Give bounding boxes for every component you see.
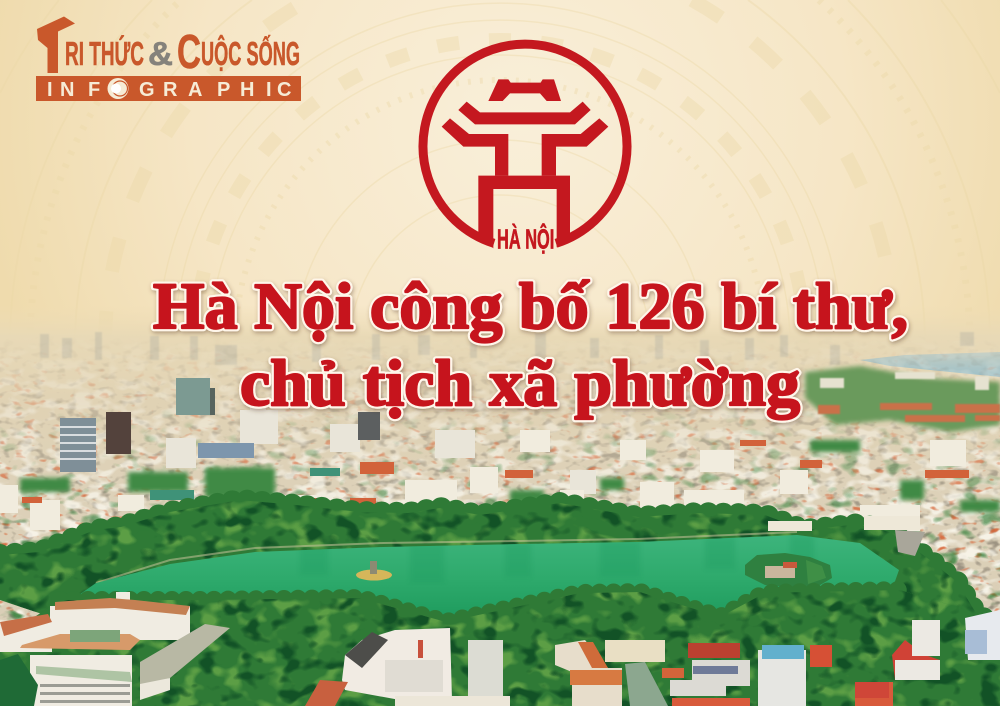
- trees surrounding the lake: [0, 500, 1000, 640]
- title red lettering: [153, 270, 908, 420]
- water surface: [76, 535, 899, 622]
- foliage highlights: [0, 500, 1000, 640]
- Hoan Kiem lake: [76, 535, 899, 622]
- title red lettering: chủ tịch xã phường: [240, 347, 800, 420]
- mid-ground roofs: [0, 430, 966, 531]
- foliage shadows: [0, 500, 1000, 640]
- city base haze: [0, 305, 1000, 706]
- dense buildings texture: [0, 335, 1000, 706]
- logo wordmark: C: [177, 26, 201, 79]
- emblem lower right roof and column: [542, 118, 608, 176]
- logo wordmark: RI THỨC: [65, 35, 144, 72]
- right building complex: [555, 610, 1000, 706]
- Turtle Tower islet: [356, 561, 392, 580]
- emblem ring: [423, 44, 627, 243]
- foreground foliage shadows: [0, 590, 1000, 706]
- background: cream paper with bronze drum pattern: [0, 0, 1000, 345]
- brand logo: Tri thức & Cuộc sống Infographic: [36, 16, 301, 101]
- shoreline: [96, 532, 797, 583]
- distant tower silhouettes: [40, 332, 974, 365]
- Ngoc Son island: [745, 553, 832, 588]
- left building complex: [0, 592, 230, 706]
- emblem upper roof: [458, 102, 591, 124]
- foreground buildings and trees: [0, 590, 1000, 706]
- logo infographic band: INF: [47, 79, 100, 101]
- title white halo: Hà Nội công bố 126 bí thư,: [153, 270, 908, 343]
- title white halo: [153, 270, 908, 420]
- west lake in the distance: [860, 352, 1000, 377]
- street pavilion by the lake: [768, 516, 920, 531]
- central building complex: [305, 628, 510, 706]
- foreground foliage highlights: [0, 590, 1000, 706]
- title white halo: chủ tịch xã phường: [240, 347, 800, 420]
- emblem lower left roof and column: [442, 118, 508, 176]
- emblem name: HÀ NỘI: [497, 222, 554, 254]
- towers on the left: [60, 418, 96, 472]
- logo infographic band: GRAPHIC: [139, 79, 291, 101]
- emblem gate: [478, 176, 570, 248]
- logo wordmark: UỘC SỐNG: [201, 34, 300, 72]
- northern tree belt: [0, 500, 1000, 640]
- logo wordmark: [65, 26, 300, 79]
- scalloped tree crowns along the belt top: [0, 500, 1000, 630]
- emblem roof top: [488, 79, 561, 101]
- park and reddish rooftops upper right: [805, 366, 1000, 432]
- aerial city photograph: [0, 305, 1000, 706]
- title: [153, 270, 908, 420]
- foreground tree base: [0, 590, 1000, 706]
- logo wordmark: &: [148, 35, 173, 72]
- logo infographic band: [36, 76, 301, 101]
- Hanoi emblem: [423, 44, 627, 254]
- scalloped tree crowns along the south shore: [60, 590, 900, 622]
- green clusters between the rooftops: [20, 440, 1000, 520]
- logo big T mark: [37, 16, 75, 73]
- title red lettering: Hà Nội công bố 126 bí thư,: [153, 270, 908, 343]
- water reflections: [304, 536, 812, 558]
